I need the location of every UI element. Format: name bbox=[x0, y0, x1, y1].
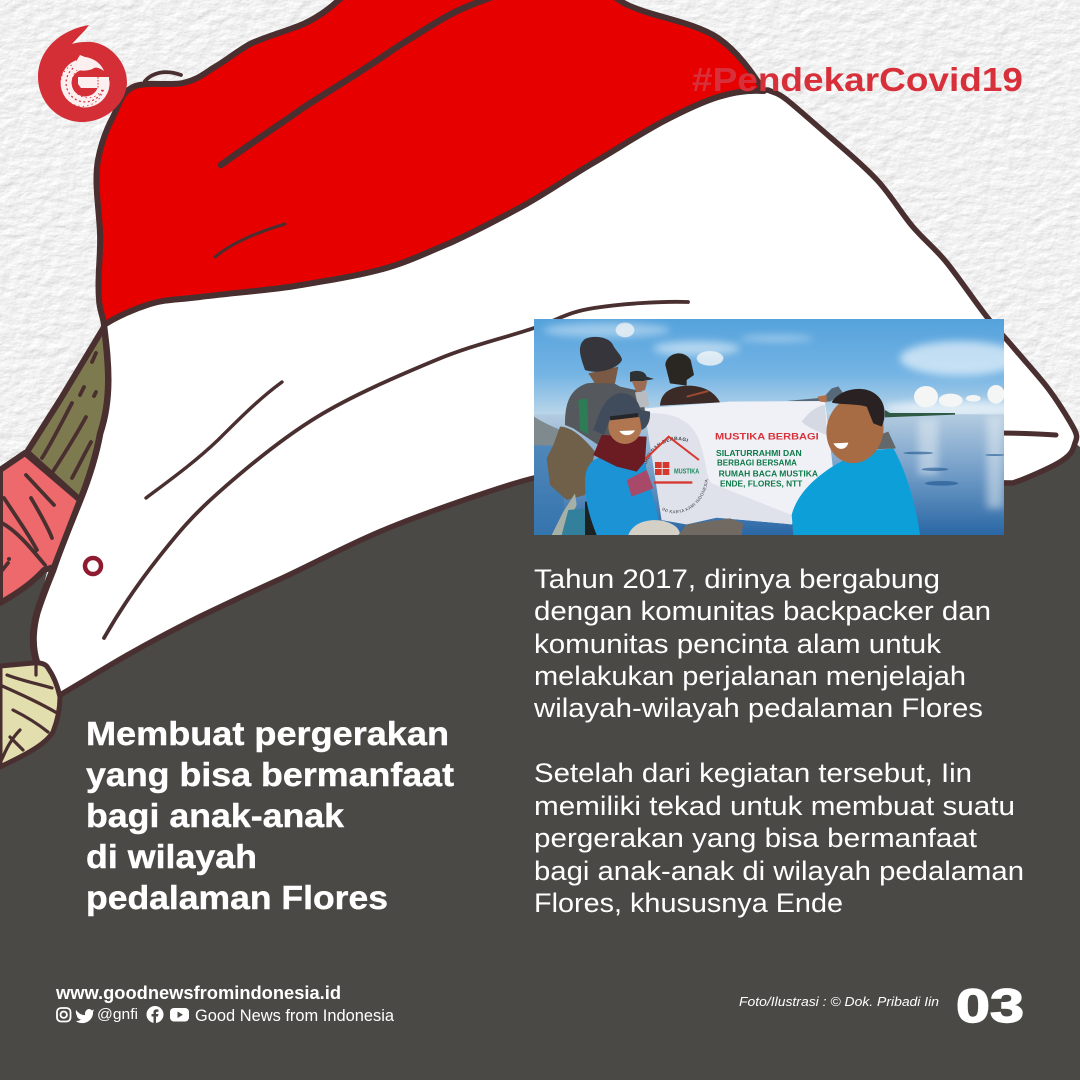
olive stick section bbox=[27, 327, 108, 500]
body text: paragraph two: pergerakan yang bisa bermanfaat bbox=[534, 823, 978, 853]
banner seal ring text: TURRAHMI DAN BERBAGI bbox=[644, 436, 688, 466]
icon: twitter bbox=[76, 1009, 94, 1023]
dark lower background bbox=[0, 443, 1080, 1080]
sea bbox=[534, 414, 1005, 535]
heading bbox=[86, 715, 454, 916]
body text: paragraph two bbox=[534, 758, 1024, 918]
heading: pedalaman Flores bbox=[86, 879, 388, 916]
social name: Good News from Indonesia bbox=[195, 1006, 395, 1025]
banner small logo label: MUSTIKA bbox=[674, 466, 700, 475]
body text: paragraph one: dengan komunitas backpacker dan bbox=[534, 596, 991, 626]
body text: paragraph one: wilayah-wilayah pedalaman Flores bbox=[533, 693, 983, 723]
pink wrap section bbox=[0, 453, 80, 603]
banner body text bbox=[716, 448, 818, 488]
body text: paragraph two: memiliki tekad untuk membuat suatu bbox=[534, 791, 1015, 821]
flag left edge stroke bbox=[33, 328, 108, 663]
logo G mark bbox=[78, 77, 109, 88]
logo: GNFI emblem bbox=[38, 25, 127, 122]
banner body text: ENDE, FLORES, NTT bbox=[720, 478, 802, 488]
handle: @gnfi bbox=[97, 1006, 138, 1023]
body text: paragraph two: Setelah dari kegiatan tersebut, Iin bbox=[534, 758, 972, 788]
body text: paragraph one: melakukan perjalanan menjelajah bbox=[534, 661, 966, 691]
banner body text: SILATURRAHMI DAN bbox=[716, 448, 802, 458]
banner body text: RUMAH BACA MUSTIKA bbox=[719, 468, 818, 478]
flag eyelet ring bbox=[85, 558, 101, 574]
website url: www.goodnewsfromindonesia.id bbox=[55, 982, 341, 1003]
logo white ring bbox=[60, 64, 104, 106]
island bbox=[885, 410, 955, 417]
flag fold lines bbox=[104, 0, 1056, 638]
banner headline: MUSTIKA BERBAGI bbox=[715, 432, 819, 442]
icon: youtube bbox=[170, 1008, 189, 1022]
body text: paragraph one: Tahun 2017, dirinya bergabung bbox=[534, 564, 940, 594]
logo red swirl bbox=[38, 25, 127, 122]
body text: paragraph two: bagi anak-anak di wilayah pedalaman bbox=[534, 856, 1024, 886]
back passengers bbox=[565, 337, 720, 455]
illustration: Indonesian flag on a stick bbox=[0, 0, 1077, 767]
page number: 03 bbox=[956, 979, 1024, 1032]
sky and clouds bbox=[534, 319, 1030, 419]
left passenger arm and boat bbox=[534, 417, 597, 535]
banner body text: BERBAGI BERSAMA bbox=[717, 458, 797, 468]
photo credit: Foto/Ilustrasi : © Dok. Pribadi Iin bbox=[739, 994, 939, 1009]
body text: paragraph two: Flores, khususnya Ende bbox=[534, 888, 843, 918]
footer: website and social handles bbox=[55, 982, 395, 1025]
flag red band bbox=[96, 0, 764, 325]
heading: Membuat pergerakan bbox=[86, 715, 449, 752]
heading: di wilayah bbox=[86, 838, 257, 875]
icon: instagram bbox=[57, 1008, 70, 1022]
woman with hat bbox=[585, 393, 743, 535]
man in blue shirt bbox=[792, 389, 920, 535]
body text: paragraph one bbox=[533, 564, 991, 723]
cream tassel bbox=[0, 663, 60, 767]
heading: bagi anak-anak bbox=[86, 797, 345, 834]
flag white band bbox=[33, 90, 1077, 695]
photo: volunteers holding banner on a boat bbox=[534, 319, 1004, 535]
hashtag: #PendekarCovid19 bbox=[692, 61, 1023, 98]
banner: INI KARYA KAMI INDONESIA bbox=[662, 480, 708, 514]
heading: yang bisa bermanfaat bbox=[86, 756, 454, 793]
icon: facebook bbox=[146, 1006, 164, 1023]
body text: paragraph one: komunitas pencinta alam untuk bbox=[534, 629, 942, 659]
logo eagle head bbox=[73, 55, 104, 71]
banner bbox=[644, 401, 833, 524]
